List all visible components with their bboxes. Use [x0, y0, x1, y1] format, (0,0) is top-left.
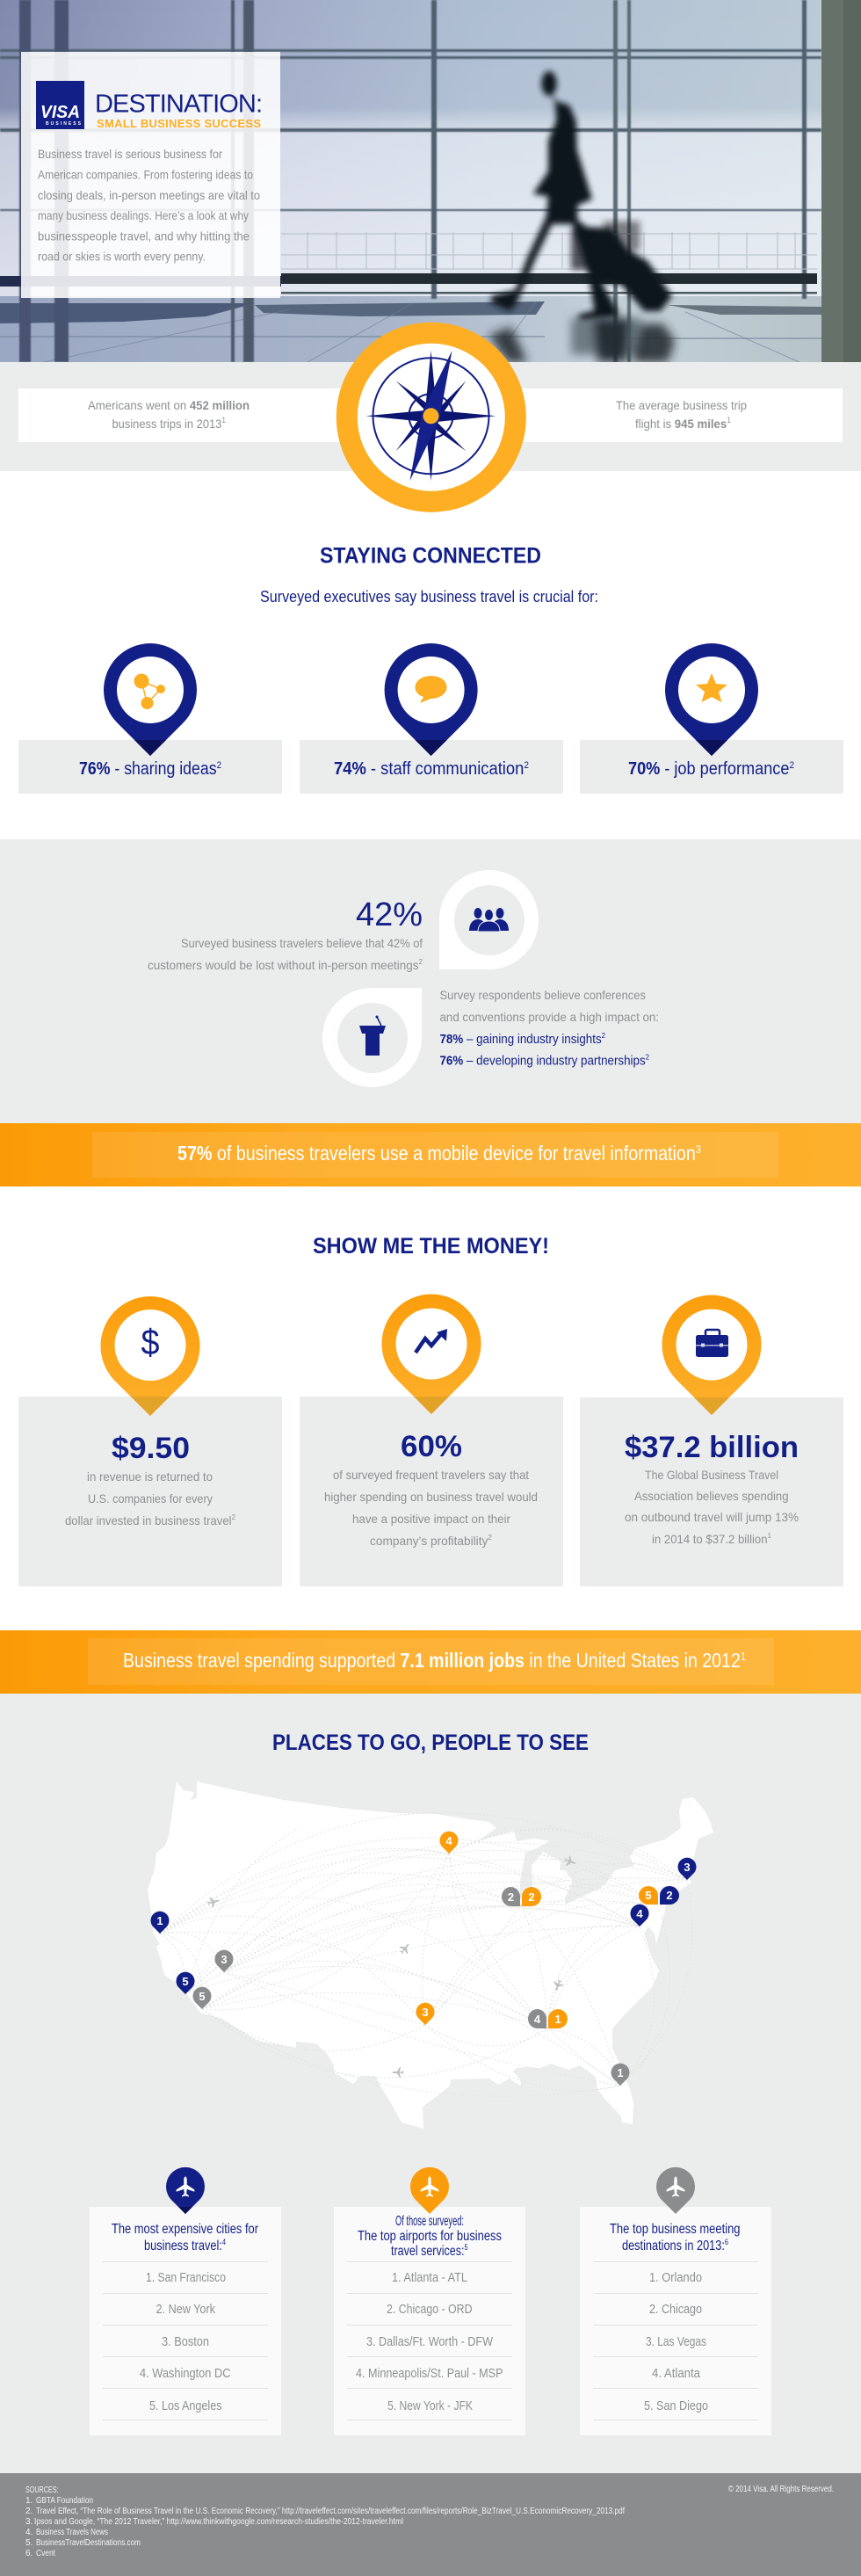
map pins: 4: [445, 1834, 452, 1847]
map pins: [150, 1832, 697, 2086]
map pins: 3: [422, 2006, 429, 2019]
map pins: 2: [528, 1890, 535, 1904]
Visa Business logo: BUSINESS: [46, 121, 82, 127]
panel: sharing ideas: [18, 643, 282, 794]
icon: people: [439, 870, 539, 969]
stat: 945 miles: flight is 945 miles: [635, 417, 730, 431]
intro text: American companies. From fostering ideas to: [38, 167, 253, 181]
text: conferences: 76% – developing industry partnerships: [439, 1055, 661, 1069]
Visa Business logo: [36, 81, 84, 129]
footer: sources: 2.: [25, 2507, 33, 2516]
panel: 60%: higher spending on business travel would: [324, 1490, 538, 1504]
banner: mobile device: 57% of business travelers use a mobile device for travel information: [177, 1142, 777, 1165]
card: top airports: 5: [464, 2243, 467, 2252]
panel: $9.50: [18, 1296, 282, 1586]
panel: $37.2 billion: in 2014 to $37.2 billion: [652, 1532, 775, 1546]
banner: mobile device: 3: [696, 1143, 701, 1156]
panel: $37.2 billion: $37.2 billion: [625, 1431, 799, 1464]
map pins: 4: [534, 2013, 541, 2026]
icon: navy plane pin: [166, 2167, 205, 2214]
footer: sources: Cvent: [36, 2549, 55, 2558]
person silhouette: [490, 71, 672, 320]
panel: 60%: [300, 1294, 563, 1586]
intro text: businesspeople travel, and why hitting the: [38, 229, 250, 243]
text: customers lost: [148, 936, 423, 972]
card: top airports: 1. Atlanta - ATL: [392, 2270, 467, 2285]
map pins: 1: [617, 2066, 624, 2079]
footer: sources: Business Travels News: [36, 2528, 108, 2537]
railing: [281, 232, 817, 269]
card: top meeting destinations: 4. Atlanta: [652, 2366, 701, 2381]
stat: 452 million trips: 1: [221, 416, 226, 424]
stat: 452 million trips: [18, 388, 370, 442]
icon: network: [134, 673, 165, 709]
footer: sources: [0, 2473, 861, 2576]
panel: 60%: 60%: [401, 1430, 462, 1463]
stat: 945 miles: [492, 388, 843, 442]
card: most expensive cities: 1. San Francisco: [146, 2270, 226, 2285]
card: most expensive cities: 4: [222, 2238, 226, 2246]
card: most expensive cities: 2. New York: [156, 2302, 215, 2317]
footer: sources: 1.: [25, 2496, 33, 2506]
footer: sources: 3.: [25, 2517, 33, 2527]
icon: briefcase: [696, 1330, 728, 1357]
map pins: 5: [199, 1990, 206, 2003]
panel: 60%: 2: [488, 1533, 492, 1542]
footer: sources: Travel Effect, “The Role of Business Travel in the U.S. Economic Recovery,” http://traveleffect.com/sites/traveleffect.com/files/reports/Role_BizTravel_U.S.EconomicRecovery_2013.pdf: [36, 2507, 625, 2516]
footer: sources: GBTA Foundation: [36, 2496, 93, 2506]
intro text: closing deals, in-person meetings are vital to: [38, 188, 260, 202]
card: most expensive cities: [90, 2167, 281, 2435]
subheading: Surveyed executives say business travel is crucial for:: [260, 588, 598, 606]
stat: 945 miles: 1: [727, 416, 731, 424]
icon: orange plane pin: [410, 2167, 449, 2214]
text: customers lost: Surveyed business travelers believe that 42% of: [181, 936, 423, 950]
card: top meeting destinations: 6: [725, 2238, 728, 2246]
card: top airports: 5. New York - JFK: [387, 2398, 473, 2413]
stat: 452 million trips: business trips in 2013: [112, 417, 231, 431]
footer: sources: 5.: [25, 2538, 33, 2548]
map pins: 1: [156, 1914, 163, 1927]
heading: show me the money: SHOW ME THE MONEY!: [313, 1234, 549, 1259]
banner: 7.1 million jobs: Business travel spending supported 7.1 million jobs in the United States in 2012: [123, 1649, 778, 1672]
banner: mobile device: [0, 1123, 861, 1186]
panel: sharing ideas: 76% - sharing ideas: [79, 759, 230, 779]
footer: sources: 4.: [25, 2528, 33, 2537]
footer: sources: SOURCES:: [25, 2485, 58, 2495]
text: conferences: 2: [602, 1031, 605, 1040]
panel: staff communication: 74% - staff communication: [334, 759, 538, 779]
Visa Business logo: VISA: [40, 103, 80, 122]
person reflection: [489, 318, 675, 362]
text: conferences: 78% – gaining industry insights: [439, 1033, 613, 1047]
intro panel: [21, 52, 280, 298]
panel: $9.50: $9.50: [112, 1432, 190, 1465]
card: top meeting destinations: destinations in 2013:: [622, 2239, 747, 2253]
card: top airports: 3. Dallas/Ft. Worth - DFW: [366, 2334, 494, 2349]
text: conferences: and conventions provide a high impact on:: [439, 1010, 659, 1024]
icon: speech bubble: [415, 676, 446, 703]
card: top meeting destinations: 1. Orlando: [649, 2270, 702, 2285]
panel: in-person meetings: [0, 839, 861, 1123]
panel: staff communication: 2: [524, 760, 529, 771]
text: conferences: Survey respondents believe conferences: [439, 988, 646, 1002]
card: top meeting destinations: 3. Las Vegas: [646, 2334, 706, 2349]
footer: sources: BusinessTravelDestinations.com: [36, 2538, 141, 2548]
card: top airports: 2. Chicago - ORD: [387, 2302, 473, 2317]
icon: dollar: $: [141, 1322, 160, 1362]
card: top airports: travel services:: [391, 2244, 481, 2259]
text: customers lost: 2: [418, 957, 423, 966]
map pins: 5: [645, 1889, 652, 1902]
icon: trend arrow: [416, 1329, 447, 1353]
panel: $37.2 billion: The Global Business Travel: [645, 1468, 778, 1482]
heading: staying connected: STAYING CONNECTED: [320, 543, 541, 568]
card: most expensive cities: The most expensive cities for: [112, 2222, 258, 2237]
panel: job performance: [580, 643, 843, 794]
panel: 60%: have a positive impact on their: [352, 1512, 510, 1526]
hero photo: traveler walking through airport terminal: [0, 0, 861, 362]
card: top meeting destinations: 2. Chicago: [649, 2302, 702, 2317]
map pins: 2: [666, 1889, 673, 1902]
card: top meeting destinations: [580, 2167, 771, 2435]
icon: gray plane pin: [656, 2167, 695, 2214]
panel: 60%: of surveyed frequent travelers say that: [333, 1468, 529, 1482]
pillar: [821, 0, 861, 362]
card: most expensive cities: business travel:: [144, 2239, 239, 2253]
panel: $9.50: U.S. companies for every: [88, 1491, 213, 1506]
stat: 452 million trips: Americans went on 452 million: [88, 398, 250, 412]
flight paths: [160, 1813, 692, 2096]
footer: sources: Ipsos and Google, “The 2012 Traveler,” http://www.thinkwithgoogle.com/research-studies/the-2012-traveler.html: [34, 2517, 403, 2527]
icon: podium: [322, 988, 422, 1087]
card: top meeting destinations: The top business meeting: [610, 2222, 740, 2237]
panel: $9.50: in revenue is returned to: [87, 1469, 213, 1484]
stat: 945 miles: The average business trip: [616, 398, 747, 412]
copyright: © 2014 Visa. All Rights Reserved.: [728, 2485, 834, 2494]
card: top meeting destinations: 5. San Diego: [644, 2398, 708, 2413]
intro text: road or skies is worth every penny.: [38, 250, 206, 264]
stats band: [0, 362, 861, 471]
big number 42%: 42%: [356, 896, 423, 933]
intro text: many business dealings. Here’s a look at why: [38, 208, 249, 222]
heading: places to go: PLACES TO GO, PEOPLE TO SEE: [272, 1731, 589, 1755]
footer: sources: 6.: [25, 2549, 33, 2558]
banner: 7.1 million jobs: 1: [741, 1650, 746, 1663]
card: most expensive cities: 4. Washington DC: [140, 2366, 231, 2381]
panel: $37.2 billion: [580, 1295, 843, 1586]
map pins: 4: [636, 1907, 643, 1920]
panel: 60%: company’s profitability: [370, 1534, 490, 1548]
map pins: 2: [508, 1890, 514, 1904]
panel: $9.50: dollar invested in business travel: [65, 1513, 242, 1527]
panel: places to go: [0, 1694, 861, 2473]
map pins: 1: [554, 2013, 561, 2026]
card: most expensive cities: 3. Boston: [162, 2334, 209, 2349]
map pins: 5: [182, 1975, 189, 1988]
card: top airports: [334, 2167, 525, 2435]
icon: star: [696, 673, 727, 702]
panel: $37.2 billion: 1: [768, 1531, 771, 1540]
text: conferences: [439, 988, 659, 1069]
panel: staff communication: [300, 643, 563, 794]
panel: $9.50: 2: [232, 1513, 235, 1521]
panel: job performance: 70% - job performance: [628, 759, 803, 779]
intro text: Business travel is serious business for: [38, 147, 222, 161]
planes on routes: [206, 1854, 577, 2078]
map pins: 3: [221, 1953, 228, 1966]
title: SMALL BUSINESS SUCCESS: [97, 117, 261, 130]
panel: sharing ideas: 2: [217, 760, 221, 771]
intro text: [38, 147, 260, 264]
text: customers lost: customers would be lost without in-person meetings: [148, 958, 430, 972]
banner: 7.1 million jobs: [0, 1630, 861, 1694]
card: top airports: The top airports for business: [358, 2229, 502, 2244]
card: top airports: 4. Minneapolis/St. Paul - MSP: [356, 2366, 503, 2381]
panel: $37.2 billion: Association believes spending: [634, 1489, 789, 1503]
map pins: 3: [684, 1861, 691, 1874]
card: top airports: Of those surveyed:: [395, 2214, 464, 2229]
map of the United States: [148, 1781, 713, 2129]
card: most expensive cities: 5. Los Angeles: [149, 2398, 221, 2413]
panel: $37.2 billion: on outbound travel will jump 13%: [625, 1510, 799, 1524]
panel: job performance: 2: [789, 760, 794, 771]
icon: compass: [336, 323, 526, 512]
title: DESTINATION:: [95, 90, 263, 118]
text: conferences: 2: [646, 1053, 649, 1062]
